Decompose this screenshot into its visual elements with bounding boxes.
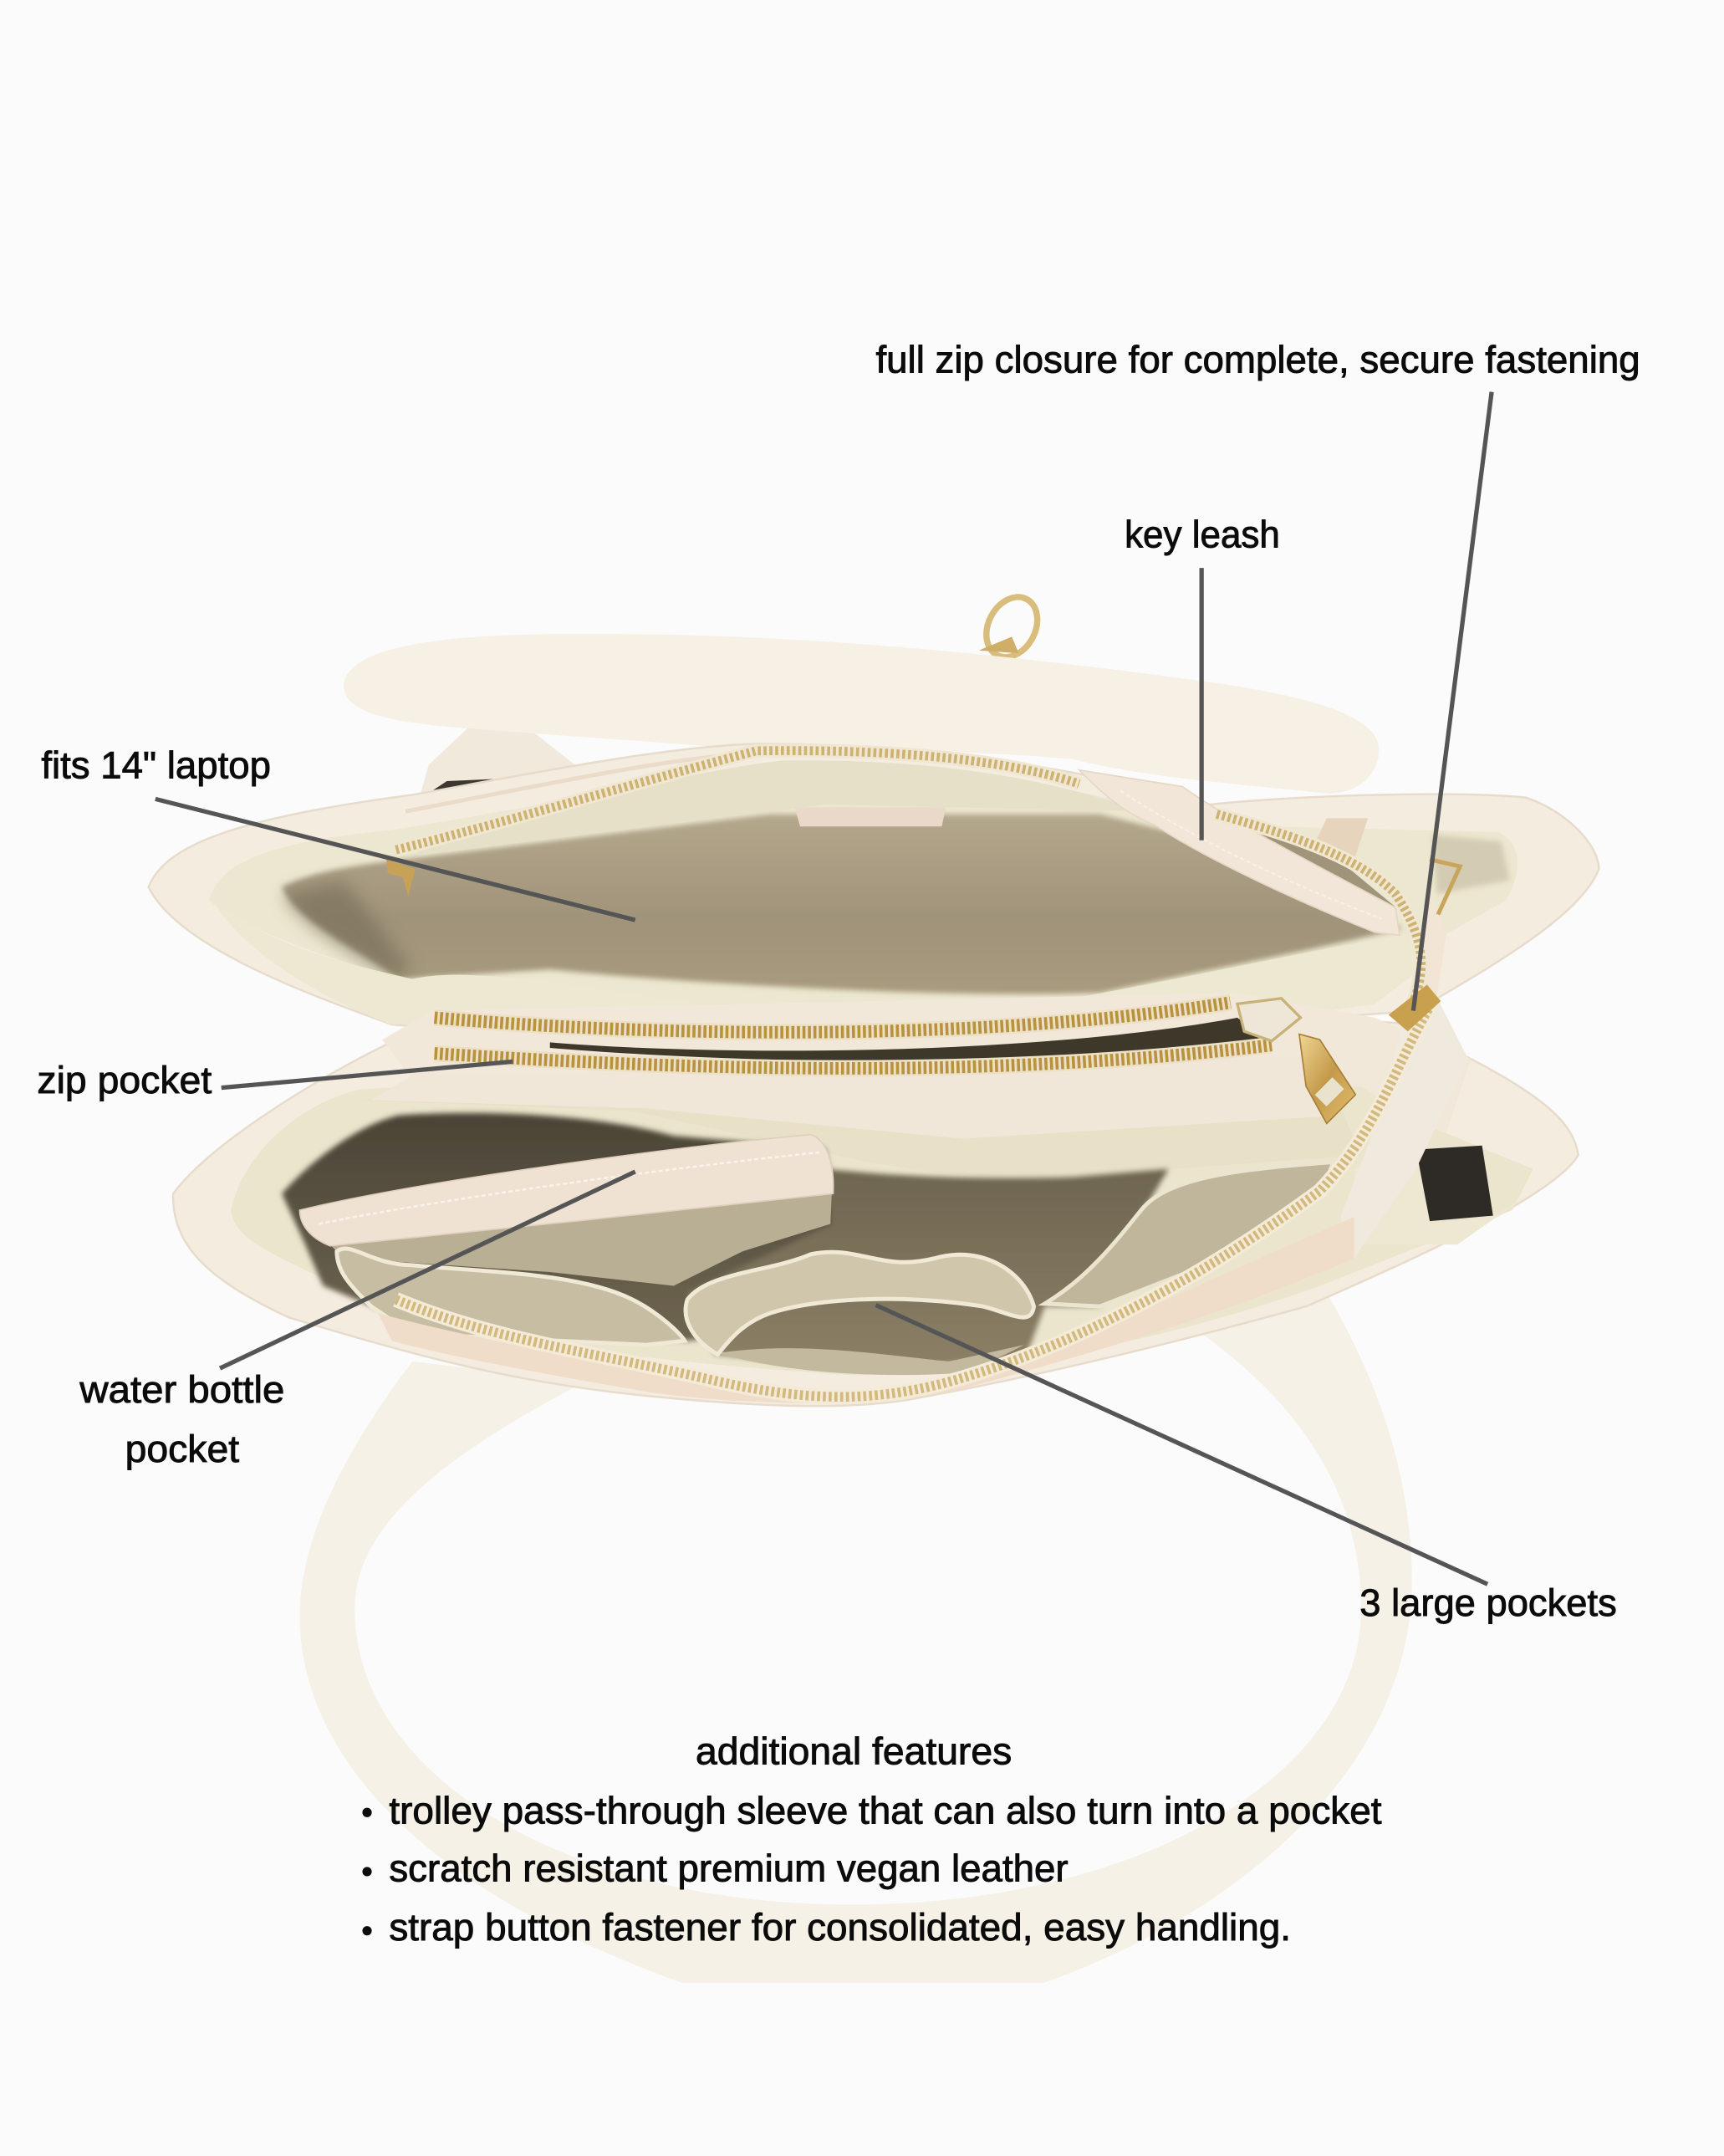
line: key leash xyxy=(1201,568,1203,840)
callout leader lines xyxy=(156,392,1492,1584)
feature list item: scratch resistant: scratch resistant premium vegan leather xyxy=(389,1847,1069,1889)
bag photo xyxy=(149,588,1599,1987)
upper taupe interior xyxy=(282,814,1402,994)
upper compartment rim xyxy=(149,744,1599,1038)
feature list item: strap button: strap button fastener for consolidated, easy handling. xyxy=(389,1906,1291,1949)
icon: gold ring xyxy=(977,588,1048,666)
label: water bottle pocket: water bottle xyxy=(79,1368,284,1411)
line: zip pocket xyxy=(222,1061,513,1088)
label tag xyxy=(794,807,946,826)
icon: zip end stop xyxy=(1389,984,1441,1031)
zip pocket double zipper xyxy=(435,1003,1272,1068)
dark left well xyxy=(282,1113,852,1341)
icon: zipper slider and pull xyxy=(1237,999,1355,1123)
label: water bottle pocket xyxy=(79,1368,284,1470)
middle pocket xyxy=(686,1252,1034,1355)
strap band xyxy=(1317,818,1368,860)
heading: additional features: additional features xyxy=(696,1730,1012,1773)
icon: front handle loop xyxy=(299,1293,1412,1987)
label: water bottle pocket: pocket xyxy=(125,1428,240,1470)
upper back band xyxy=(412,760,1141,856)
label: fits laptop: fits 14" laptop xyxy=(41,744,271,787)
label: key leash: key leash xyxy=(1125,513,1280,555)
upper zip xyxy=(396,751,1421,1011)
rim shaded inner line xyxy=(405,754,749,811)
label: full zip closure: full zip closure for complete, secure fastening xyxy=(875,339,1640,381)
icon: small zipper pull xyxy=(386,860,416,897)
line: water bottle pocket xyxy=(220,1172,635,1368)
line: three pockets xyxy=(875,1305,1487,1584)
right pocket xyxy=(1045,1162,1334,1306)
lower compartment rim xyxy=(173,1011,1579,1406)
water bottle pocket xyxy=(299,1135,834,1285)
right dark well xyxy=(1416,1146,1493,1221)
left pocket xyxy=(337,1249,685,1345)
right inner shade xyxy=(1432,835,1509,894)
line: full zip closure xyxy=(1413,392,1492,1011)
feature list item: trolley sleeve: trolley pass-through sleeve that can also turn into a pocket xyxy=(389,1789,1382,1832)
label: zip pocket: zip pocket xyxy=(37,1059,212,1101)
leather trim under zip xyxy=(378,1217,1354,1403)
line: laptop xyxy=(156,799,635,920)
lower lining xyxy=(231,1084,1533,1375)
back handle stubs xyxy=(420,722,574,798)
leather strap lower xyxy=(1340,997,1468,1259)
bag feature infographic xyxy=(38,345,1639,1983)
lining strip in well front xyxy=(717,1345,1024,1375)
label: three large pockets: 3 large pockets xyxy=(1359,1581,1617,1624)
zip pocket panel xyxy=(382,993,1471,1142)
central well xyxy=(687,1169,1169,1368)
icon: back handle xyxy=(344,634,1379,794)
upper lining xyxy=(209,764,1517,1028)
lower main zip xyxy=(396,1007,1430,1397)
upper front lip xyxy=(213,901,1430,1024)
pocket panel band xyxy=(360,1059,1361,1178)
additional features block xyxy=(362,1730,1382,1949)
key leash strap xyxy=(1079,770,1400,935)
side chain hardware xyxy=(1430,860,1460,914)
taupe wedge by zip xyxy=(1244,830,1400,911)
